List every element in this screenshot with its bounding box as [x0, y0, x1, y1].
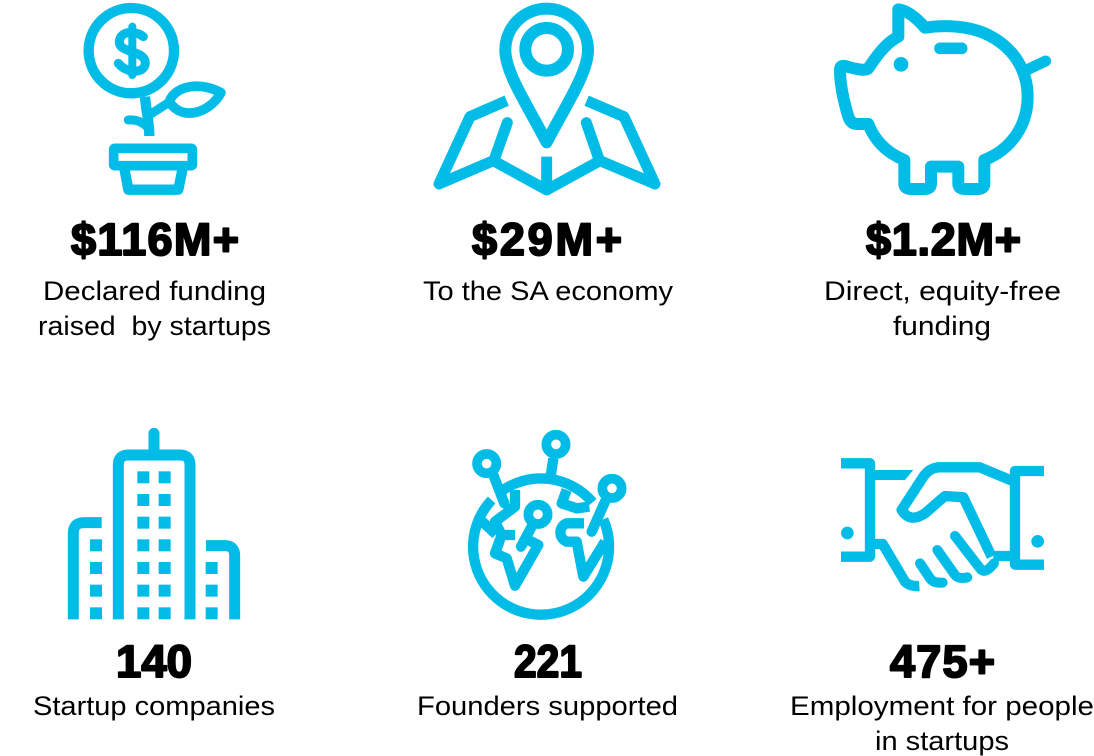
icon: map with location pin [439, 9, 655, 190]
panel: startup companies [33, 433, 275, 721]
stat: 140: 140 [116, 636, 192, 687]
label: startup companies: Startup companies [33, 691, 275, 721]
panel: declared funding [38, 8, 271, 341]
icon: city buildings [73, 433, 235, 619]
stat: $1.2M+: $1.2M+ [866, 214, 1021, 265]
panel: employment [790, 463, 1094, 756]
label: founders supported: Founders supported [417, 691, 678, 721]
label: direct, equity-free funding: funding [893, 311, 991, 341]
label: employment for people in startups [790, 691, 1094, 756]
label: direct, equity-free funding: Direct, equity-free [824, 276, 1061, 306]
stat: 475+: 475+ [890, 636, 995, 687]
label: to the SA economy: To the SA economy [423, 276, 674, 306]
stat: 221: 221 [514, 636, 582, 687]
label: direct, equity-free funding [824, 276, 1061, 341]
label: declared funding raised by startups [38, 276, 271, 341]
icon: handshake [841, 463, 1044, 586]
icon: plant with dollar coin [89, 8, 221, 190]
icon: piggy bank [840, 9, 1046, 189]
panel: SA economy [423, 9, 674, 306]
stat: $116M+: $116M+ [71, 214, 239, 265]
label: declared funding raised by startups: raised by startups [38, 311, 271, 341]
label: employment for people in startups: in startups [875, 726, 1009, 756]
label: declared funding raised by startups: Declared funding [43, 276, 266, 306]
icon: globe with pins [473, 435, 622, 615]
label: employment for people in startups: Employment for people [790, 691, 1094, 721]
panel: equity-free funding [824, 9, 1061, 341]
stat: $29M+: $29M+ [472, 214, 622, 265]
panel: founders supported [417, 435, 678, 721]
